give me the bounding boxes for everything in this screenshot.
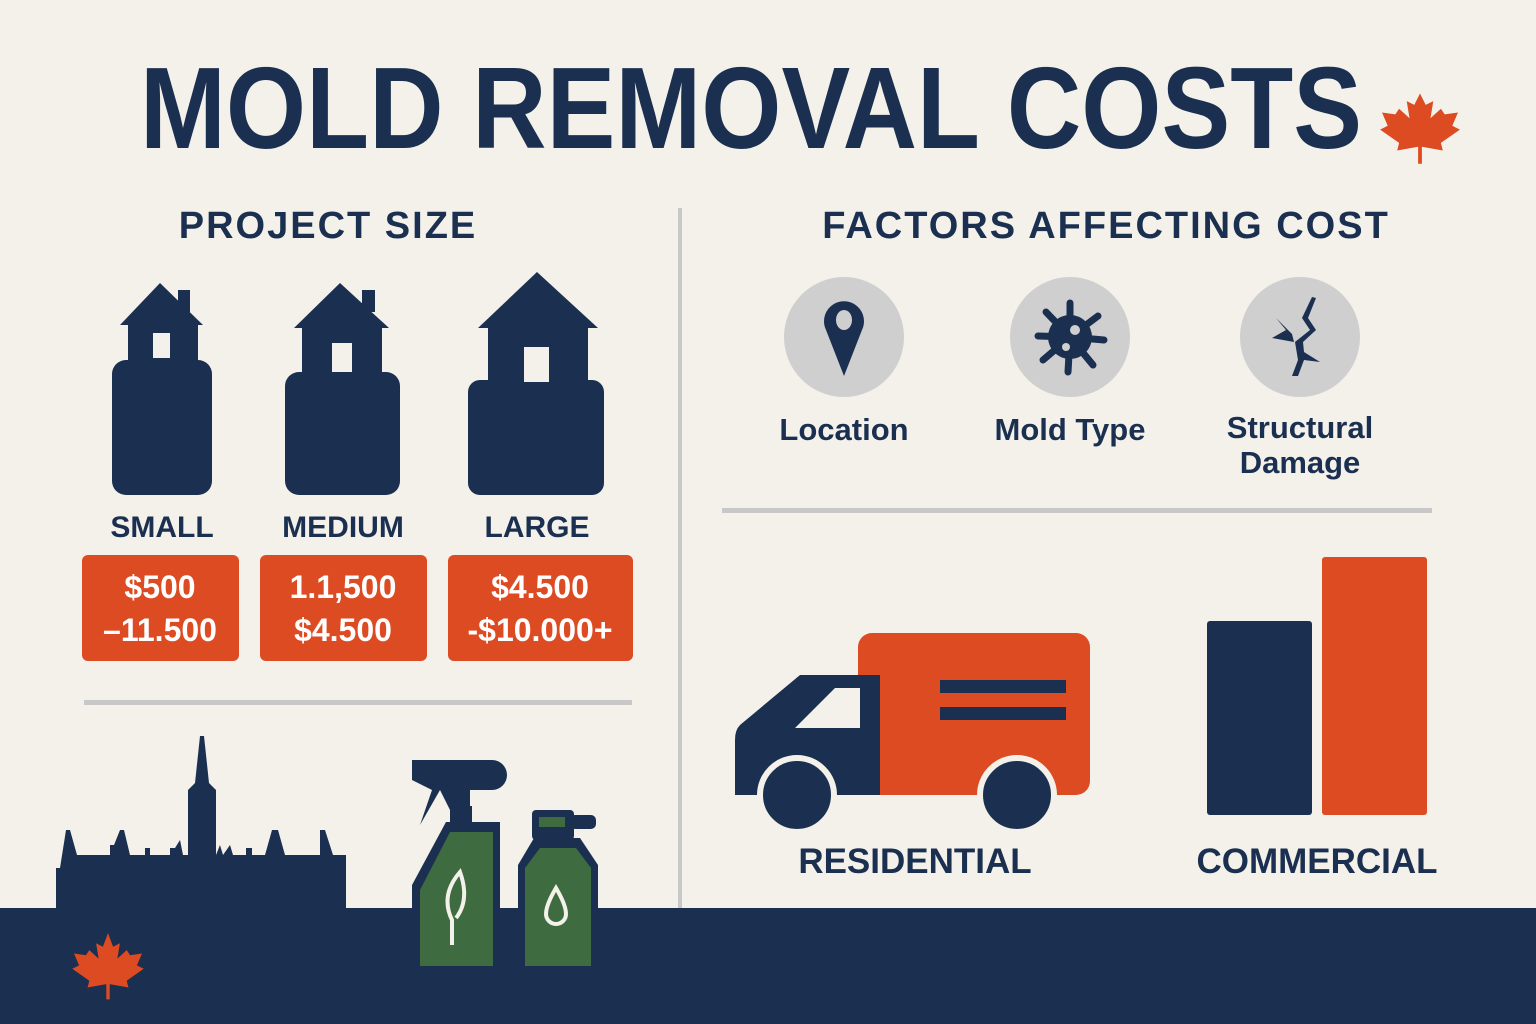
divider lines <box>678 208 682 908</box>
residential / commercial labels <box>798 842 1438 881</box>
size labels: MEDIUM <box>282 511 404 544</box>
factor labels <box>779 410 1373 480</box>
icon: spray bottle <box>412 760 507 972</box>
price box small: $500 <box>124 569 196 605</box>
size labels: LARGE <box>484 511 590 544</box>
parliament skyline <box>56 736 346 910</box>
size labels: SMALL <box>110 511 214 544</box>
price box medium: $4.500 <box>294 612 392 648</box>
price box large <box>448 555 633 661</box>
icon: location <box>784 277 904 397</box>
bar chart <box>1207 557 1427 815</box>
factor labels: Location <box>779 412 909 447</box>
heading: factors: FACTORS AFFECTING COST <box>822 205 1390 247</box>
residential / commercial labels: COMMERCIAL <box>1196 842 1438 881</box>
price box medium: 1.1,500 <box>290 569 396 605</box>
factor labels: Mold Type <box>995 412 1145 447</box>
icon: large house <box>468 272 604 495</box>
bottom band <box>0 908 1536 1024</box>
factor labels: Damage <box>1240 445 1360 480</box>
size labels <box>110 511 590 544</box>
heading: project size: PROJECT SIZE <box>179 205 477 247</box>
factor labels: Structural <box>1227 410 1373 445</box>
price box small <box>82 555 239 661</box>
title: MOLD REMOVAL COSTS <box>140 43 1362 173</box>
price box medium <box>260 555 427 661</box>
icon: small house <box>112 283 212 495</box>
icon: medium house <box>285 283 400 495</box>
icon: maple leaf bottom <box>72 933 144 999</box>
residential / commercial labels: RESIDENTIAL <box>798 842 1032 881</box>
icon: maple leaf title <box>1380 94 1460 164</box>
icon: crack <box>1240 277 1360 397</box>
icon: mold <box>1010 277 1130 397</box>
price box large: -$10.000+ <box>467 612 613 648</box>
icon: bottle <box>518 810 598 972</box>
price box small: –11.500 <box>103 612 217 648</box>
icon: truck <box>735 633 1090 832</box>
price box large: $4.500 <box>491 569 589 605</box>
